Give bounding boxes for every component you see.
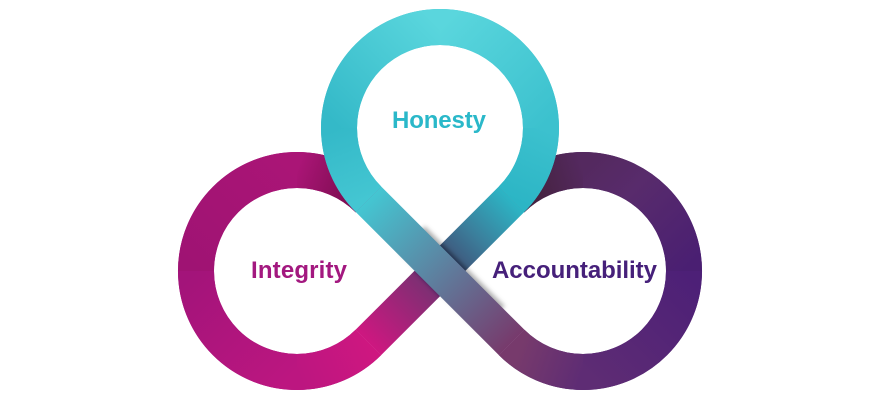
- right loop: Accountability: [512, 170, 684, 372]
- infinity loop diagram: [178, 9, 702, 390]
- label: Integrity: Integrity: [251, 257, 348, 284]
- over ribbon: teal to plum: [369, 199, 512, 342]
- label: Honesty: Honesty: [392, 107, 487, 134]
- shadow of over ribbon on white: [412, 239, 492, 319]
- top loop: Honesty: [339, 27, 541, 199]
- under ribbon: magenta to teal: [368, 199, 511, 342]
- left loop: Integrity: [196, 170, 368, 372]
- label: Accountability: Accountability: [492, 257, 658, 284]
